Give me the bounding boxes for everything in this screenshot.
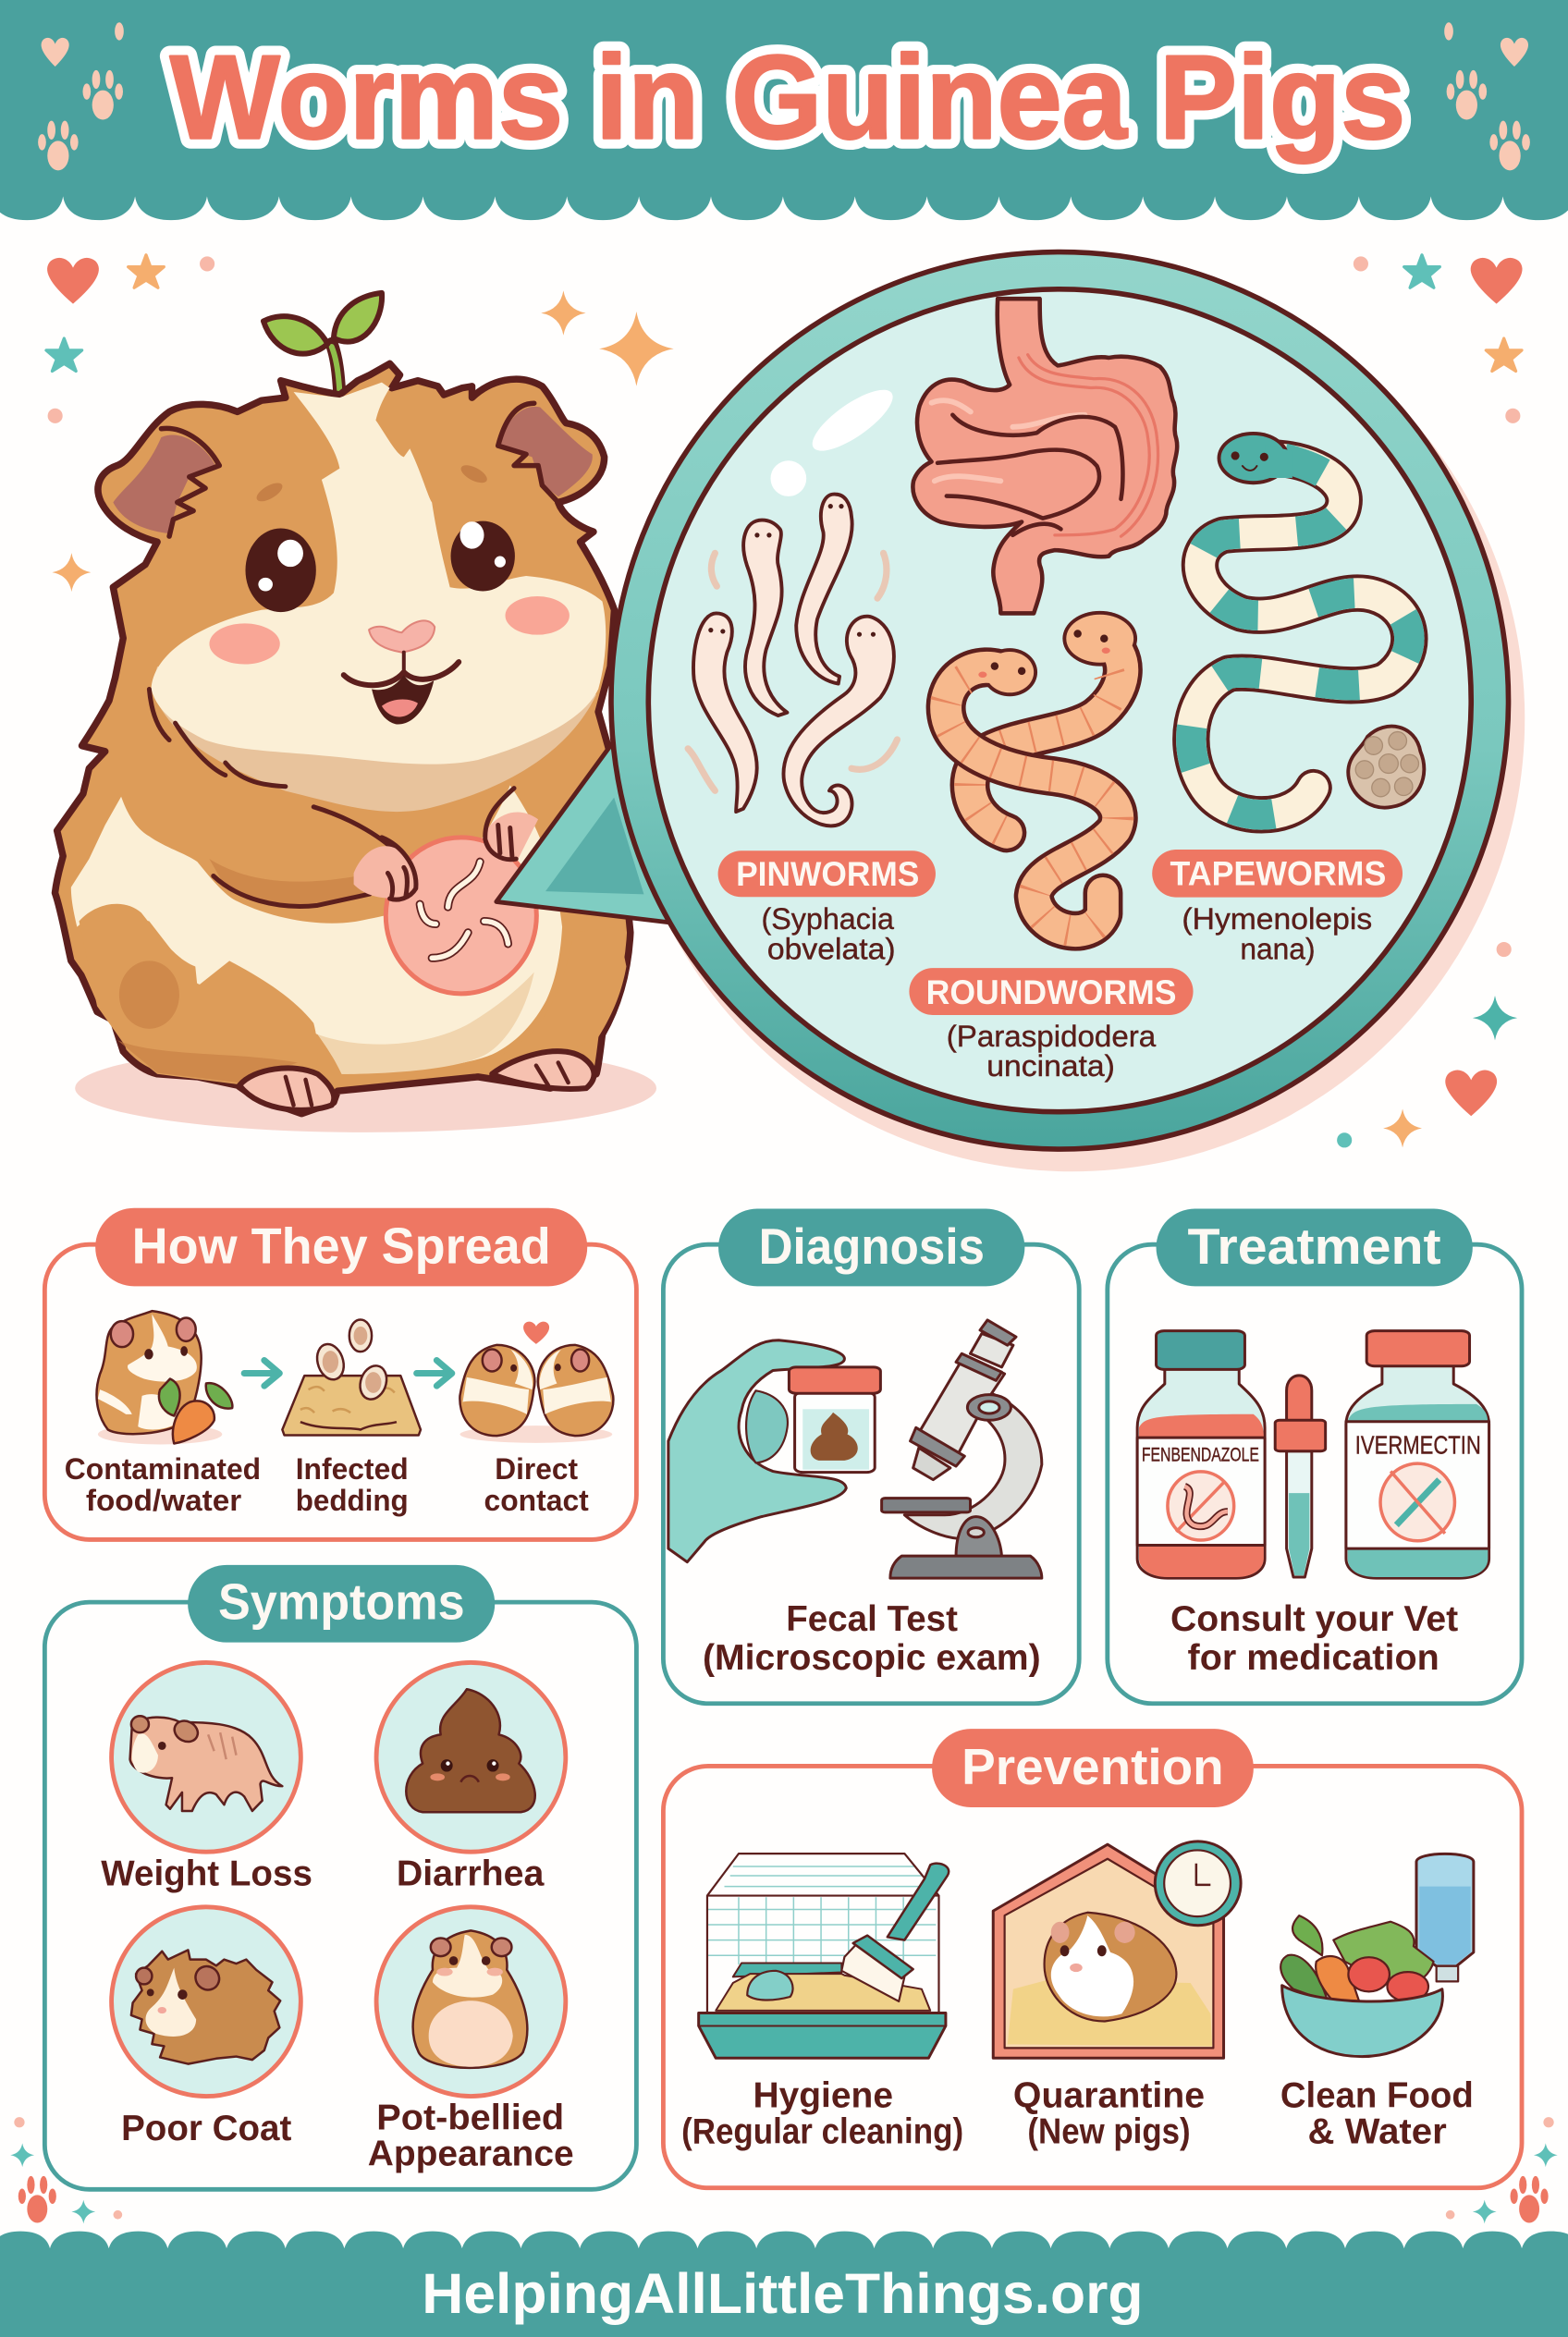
belly lines [149, 689, 398, 906]
feet [239, 1051, 594, 1110]
captions: spread [65, 1452, 589, 1517]
sprout on head [263, 293, 382, 395]
captions: diagnosis: (Microscopic exam) [703, 1638, 1041, 1678]
panel: treatment [1108, 1209, 1522, 1704]
panel: symptoms: Symptoms [218, 1572, 465, 1630]
title: Worms in Guinea Pigs [170, 31, 1405, 165]
panel: prevention [663, 1729, 1522, 2188]
captions: spread: Contaminated [65, 1452, 261, 1486]
guinea pig mascot [55, 293, 656, 1132]
face cream [152, 383, 606, 765]
label: roundworms: (Paraspidodera [947, 1020, 1156, 1053]
icon: sad poop [406, 1689, 535, 1812]
icon: food bowl and water bottle [1280, 1854, 1474, 2057]
label: tapeworms: (Hymenolepis [1182, 902, 1372, 936]
icon: microscope [882, 1320, 1042, 1578]
ground shadow [75, 1044, 656, 1132]
captions: spread: contact [484, 1484, 589, 1517]
label: pinworms [718, 850, 936, 965]
panel: how they spread: How They Spread [132, 1217, 551, 1275]
tapeworm [1191, 458, 1409, 814]
lower belly shade [318, 973, 534, 1074]
captions: prevention [681, 2076, 1474, 2151]
body silhouette [55, 363, 631, 1114]
callout pointer triangle [496, 740, 670, 923]
left paw [354, 838, 416, 899]
egg cluster [1348, 727, 1424, 808]
header decorations [38, 22, 1530, 170]
label: roundworms: uncinata) [986, 1049, 1115, 1083]
captions: prevention: Clean Food [1280, 2076, 1474, 2116]
icon: cage with brush [699, 1854, 949, 2058]
magnifier lens [611, 252, 1525, 1171]
captions: symptoms [101, 1854, 574, 2174]
captions: treatment: Consult your Vet [1170, 1599, 1458, 1639]
captions: symptoms: Appearance [368, 2135, 574, 2174]
captions: treatment: IVERMECTIN [1355, 1431, 1481, 1460]
icon: pig eating [96, 1311, 232, 1445]
left haunch [80, 904, 318, 1084]
label: pinworms: (Syphacia [761, 902, 894, 936]
right paw [485, 789, 538, 860]
footer banner [0, 2232, 1568, 2337]
panel: prevention: Prevention [962, 1738, 1224, 1795]
chin shading [152, 667, 596, 812]
belly magnified spot with worms [386, 838, 536, 994]
icon: ivermectin bottle [1346, 1331, 1489, 1578]
pinworm faces and small worms [688, 504, 897, 790]
arrow: to bedding [244, 1360, 279, 1386]
panel: how they spread [44, 1208, 636, 1539]
eyes [245, 521, 515, 612]
captions: prevention: (New pigs) [1027, 2111, 1191, 2151]
captions: treatment: for medication [1188, 1638, 1439, 1678]
lens contents [688, 299, 1424, 931]
captions: symptoms: Poor Coat [121, 2109, 291, 2148]
captions: spread: food/water [86, 1484, 242, 1517]
pinworms [693, 495, 894, 826]
tapeworm head [1218, 432, 1292, 484]
captions: diagnosis [703, 1599, 1041, 1678]
panel: treatment: Treatment [1188, 1217, 1441, 1275]
icon: gloved hand [668, 1340, 846, 1562]
captions: symptoms: Diarrhea [397, 1854, 545, 1893]
icon: scruffy pig [131, 1950, 280, 2064]
captions: prevention: & Water [1308, 2111, 1447, 2151]
icon: fenbendazole bottle [1137, 1331, 1265, 1578]
icon: bedding with eggs [282, 1319, 421, 1436]
arrow: to contact [417, 1360, 452, 1386]
icon: thin pig [130, 1716, 282, 1811]
captions: treatment: FENBENDAZOLE [1142, 1445, 1259, 1466]
captions: symptoms: Pot-bellied [376, 2098, 564, 2138]
captions: prevention: (Regular cleaning) [681, 2111, 963, 2151]
label: pinworms: obvelata) [767, 932, 896, 965]
captions: symptoms: Weight Loss [101, 1854, 312, 1893]
panel: diagnosis: Diagnosis [759, 1217, 985, 1275]
brows [255, 479, 284, 505]
right haunch [474, 927, 626, 1074]
ears [113, 403, 593, 536]
icon: dropper [1275, 1376, 1326, 1577]
captions: prevention: Quarantine [1013, 2076, 1205, 2116]
icon: sample jar [789, 1367, 880, 1473]
nose [369, 620, 435, 653]
cheeks [209, 623, 280, 665]
roundworm faces [978, 630, 1110, 678]
icon circles [112, 1662, 566, 2097]
panel: symptoms [44, 1565, 636, 2189]
mouth [344, 653, 459, 725]
icon: clock [1155, 1841, 1241, 1926]
label: tapeworms: nana) [1240, 932, 1316, 965]
footer website text: HelpingAllLittleThings.org [422, 2262, 1144, 2325]
label: roundworms: ROUNDWORMS [926, 973, 1176, 1011]
intestine [913, 299, 1177, 613]
haunch shading [117, 859, 370, 1083]
captions: diagnosis: Fecal Test [786, 1599, 958, 1639]
header banner [0, 0, 1568, 220]
captions: treatment [1142, 1431, 1481, 1678]
captions: spread: Direct [495, 1452, 578, 1486]
footer decorations [10, 2117, 1558, 2223]
panel: diagnosis [663, 1209, 1079, 1704]
captions: spread: bedding [296, 1484, 409, 1517]
icon: pot-bellied pig [413, 1930, 527, 2068]
captions: prevention: Hygiene [753, 2076, 893, 2116]
icon: two pigs touching [459, 1322, 613, 1443]
captions: spread: Infected [296, 1452, 409, 1486]
icon: quarantine house [993, 1844, 1224, 2058]
label: roundworms [909, 968, 1194, 1083]
scattered decorations: hero [46, 255, 1523, 1147]
roundworms [945, 611, 1137, 931]
title: Worms in Guinea Pigs [170, 31, 1405, 165]
label: tapeworms: TAPEWORMS [1170, 854, 1386, 893]
label: tapeworms [1152, 850, 1403, 965]
belly cream [71, 786, 562, 1074]
label: pinworms: PINWORMS [736, 854, 919, 893]
